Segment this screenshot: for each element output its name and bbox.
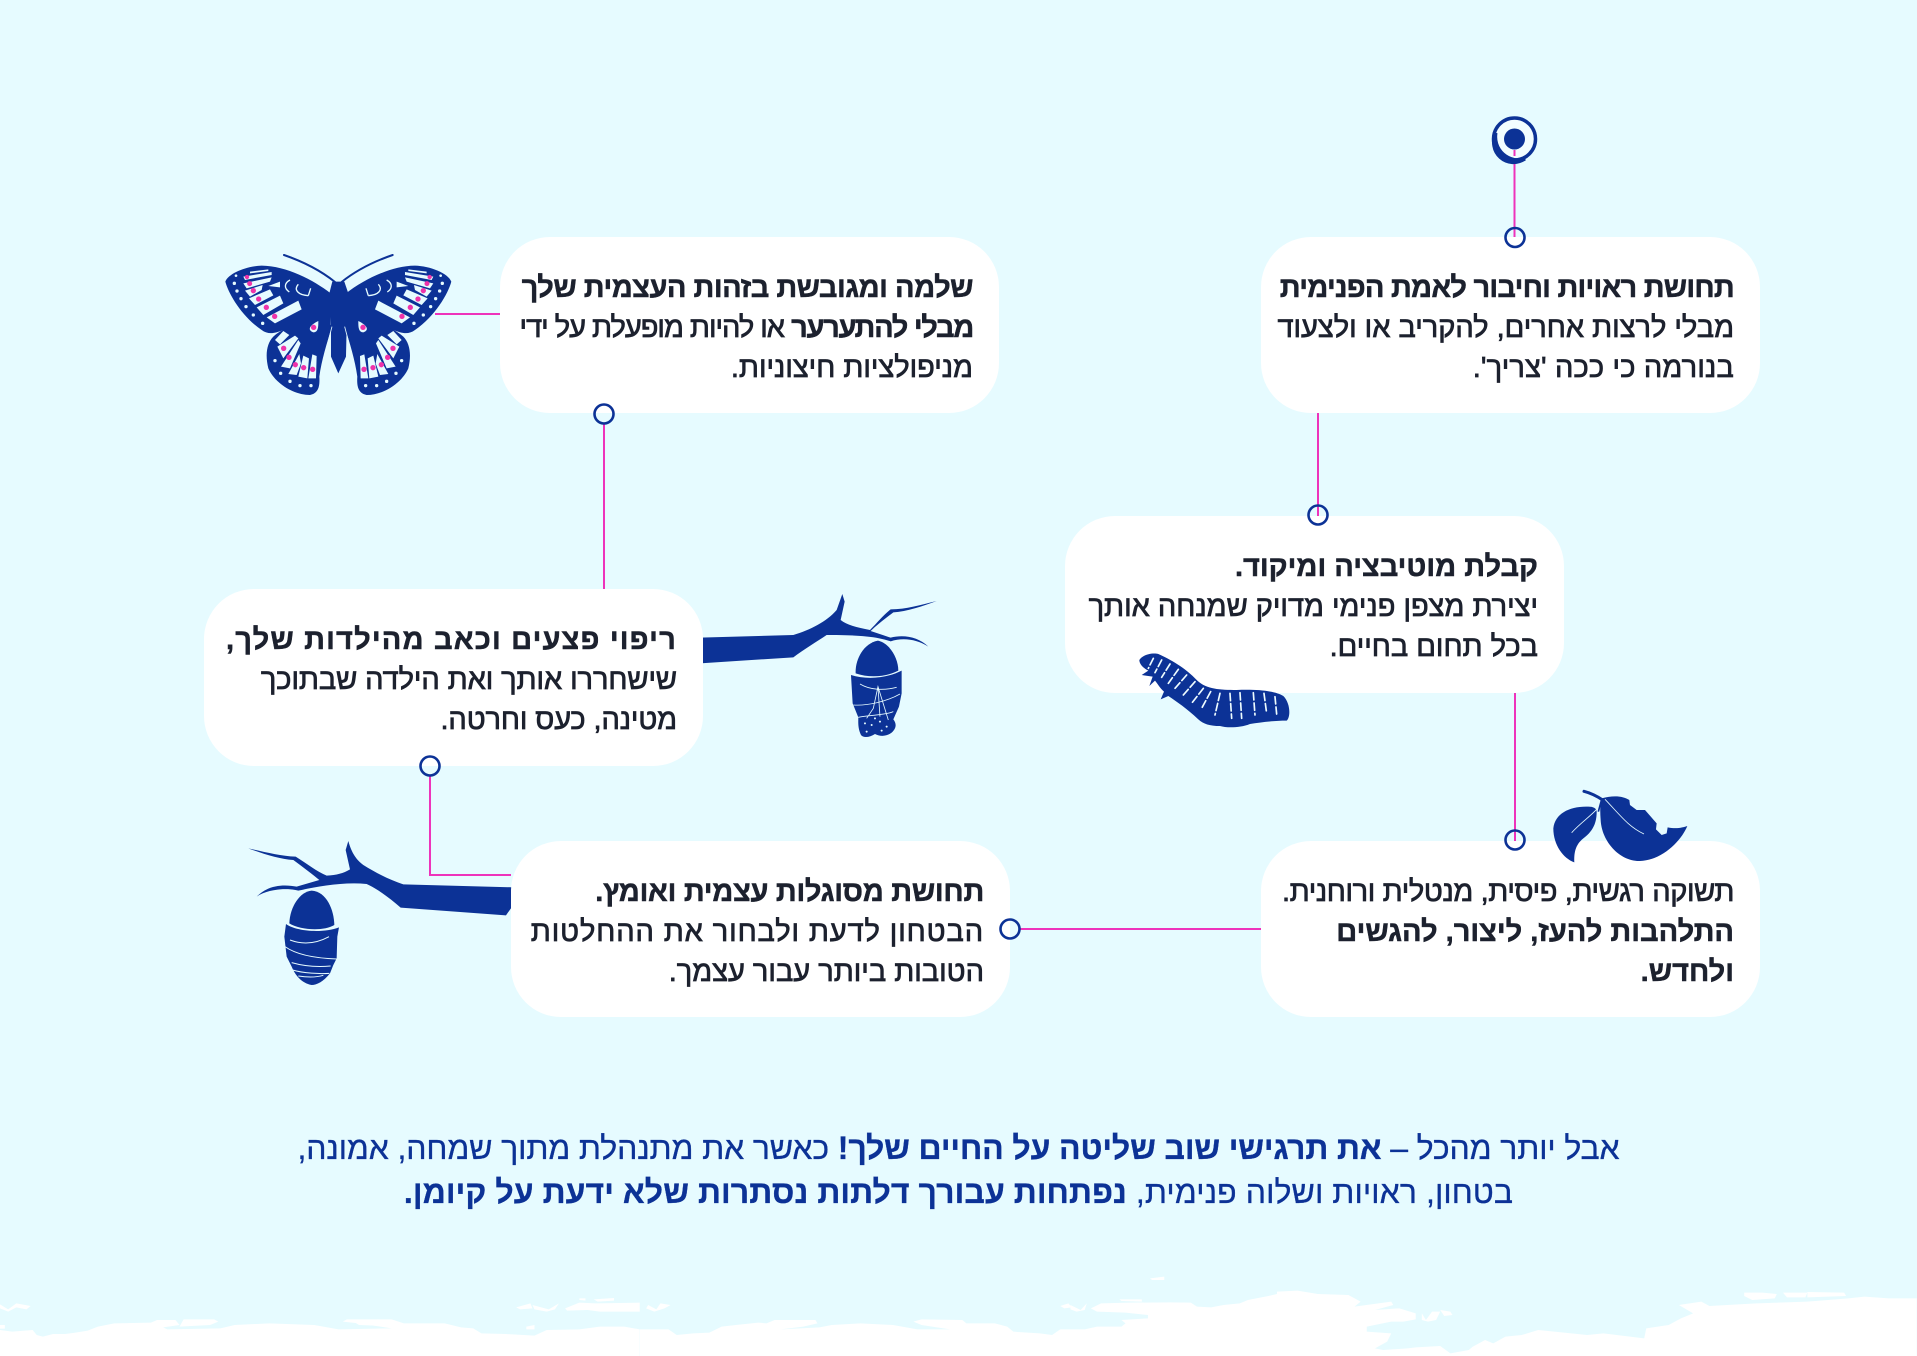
card text: בנורמה כי ככה 'צריך'. <box>1473 352 1734 384</box>
card text: מטינה, כעס וחרטה. <box>440 704 677 736</box>
card text: מבלי להתערער או להיות מופעלת על ידי <box>520 312 973 344</box>
branch: upper right cocoon <box>700 594 937 663</box>
closing text <box>297 1130 1620 1210</box>
torn white paper edge <box>0 1277 1917 1356</box>
card text <box>1088 551 1538 663</box>
card text: מבלי לרצות אחרים, להקריב או ולצעוד <box>1277 312 1734 344</box>
card text: מניפולציות חיצוניות. <box>731 352 973 384</box>
icon: hanging cocoon <box>284 891 339 985</box>
card: self-worth <box>1261 237 1760 413</box>
connector lines <box>430 150 1515 929</box>
card text: יצירת מצפן פנימי מדויק שמנחה אותך <box>1089 591 1538 623</box>
card text: בכל תחום בחיים. <box>1330 631 1538 663</box>
branch: lower left cocoon <box>248 841 513 915</box>
icon: butterfly <box>225 255 451 395</box>
card: healing <box>204 589 703 766</box>
card text <box>226 624 677 736</box>
card text: תשוקה רגשית, פיסית, מנטלית ורוחנית. <box>1282 876 1734 908</box>
card text: התלהבות להעז, ליצור, להגשים <box>1336 916 1734 948</box>
card text <box>531 876 984 988</box>
card text: תחושת ראויות וחיבור לאמת הפנימית <box>1280 272 1734 304</box>
closing text: אבל יותר מהכל – את תרגישי שוב שליטה על החיים שלך! כאשר את מתנהלת מתוך שמחה, אמונה, <box>297 1130 1620 1166</box>
card text: תחושת מסוגלות עצמית ואומץ. <box>595 876 984 908</box>
connector nodes <box>420 228 1524 938</box>
card text <box>1282 876 1734 988</box>
card: courage <box>511 841 1010 1017</box>
card text: ולחדש. <box>1641 956 1734 988</box>
card: motivation <box>1065 516 1564 693</box>
card text: הבטחון לדעת ולבחור את ההחלטות <box>531 916 984 948</box>
icon: caterpillar <box>1139 654 1289 727</box>
card text <box>1277 272 1734 384</box>
card: passion <box>1261 841 1760 1017</box>
card text <box>520 272 973 384</box>
icon: eye target <box>1494 118 1536 163</box>
closing text: בטחון, ראויות ושלוה פנימית, נפתחות עבורך דלתות נסתרות שלא ידעת על קיומן. <box>404 1174 1513 1210</box>
card: identity <box>500 237 999 413</box>
card text: שלמה ומגובשת בזהות העצמית שלך <box>522 272 973 304</box>
card text: קבלת מוטיבציה ומיקוד. <box>1235 551 1538 583</box>
icon: bitten leaves <box>1553 791 1687 862</box>
card text: ריפוי פצעים וכאב מהילדות שלך, <box>226 624 677 656</box>
card text: שישחררו אותך ואת הילדה שבתוכך <box>261 664 677 696</box>
icon: hanging chrysalis with wings <box>851 641 902 737</box>
card text: הטובות ביותר עבור עצמך. <box>669 956 984 988</box>
